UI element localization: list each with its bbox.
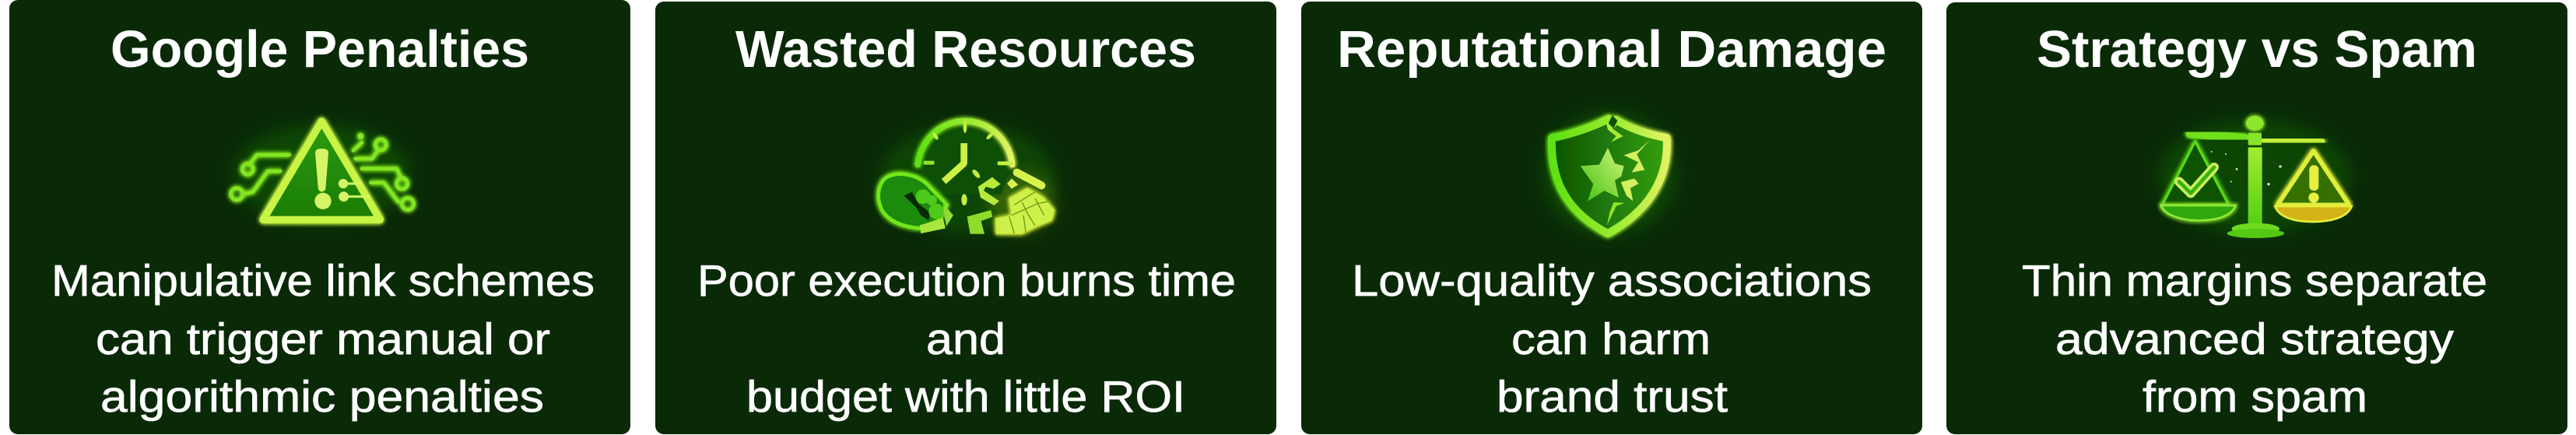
body text: budget with little ROI — [746, 372, 1185, 422]
body text: can trigger manual or — [96, 314, 550, 364]
icon: balance scale — [2158, 116, 2352, 238]
body text — [2022, 256, 2487, 422]
heading: Google Penalties — [111, 20, 529, 79]
icon: cracked shield with star — [1542, 111, 1677, 236]
panel: Wasted Resources — [655, 2, 1276, 434]
body text: Manipulative link schemes — [51, 256, 595, 306]
body text: can harm — [1511, 314, 1711, 364]
body text — [1352, 256, 1872, 422]
body text: algorithmic penalties — [100, 372, 544, 422]
card background — [1946, 2, 2567, 434]
panel: Google Penalties — [9, 0, 630, 434]
heading: Reputational Damage — [1337, 20, 1886, 79]
icon: warning triangle with circuits — [231, 121, 414, 223]
heading: Strategy vs Spam — [2037, 20, 2477, 79]
body text: and — [926, 314, 1005, 364]
card background — [1301, 2, 1922, 434]
card background — [655, 2, 1276, 434]
body text: from spam — [2143, 372, 2367, 422]
heading: Wasted Resources — [735, 20, 1196, 79]
body text — [51, 256, 595, 422]
body text: brand trust — [1497, 372, 1728, 422]
card background — [9, 0, 630, 434]
panel: Strategy vs Spam — [1946, 2, 2567, 434]
body text: Low-quality associations — [1352, 256, 1872, 306]
body text: advanced strategy — [2055, 314, 2455, 364]
body text: Thin margins separate — [2022, 256, 2487, 306]
body text: Poor execution burns time — [697, 256, 1236, 306]
panel: Reputational Damage — [1301, 2, 1922, 434]
body text — [697, 256, 1236, 422]
icon: broken clock and coins — [879, 121, 1056, 234]
